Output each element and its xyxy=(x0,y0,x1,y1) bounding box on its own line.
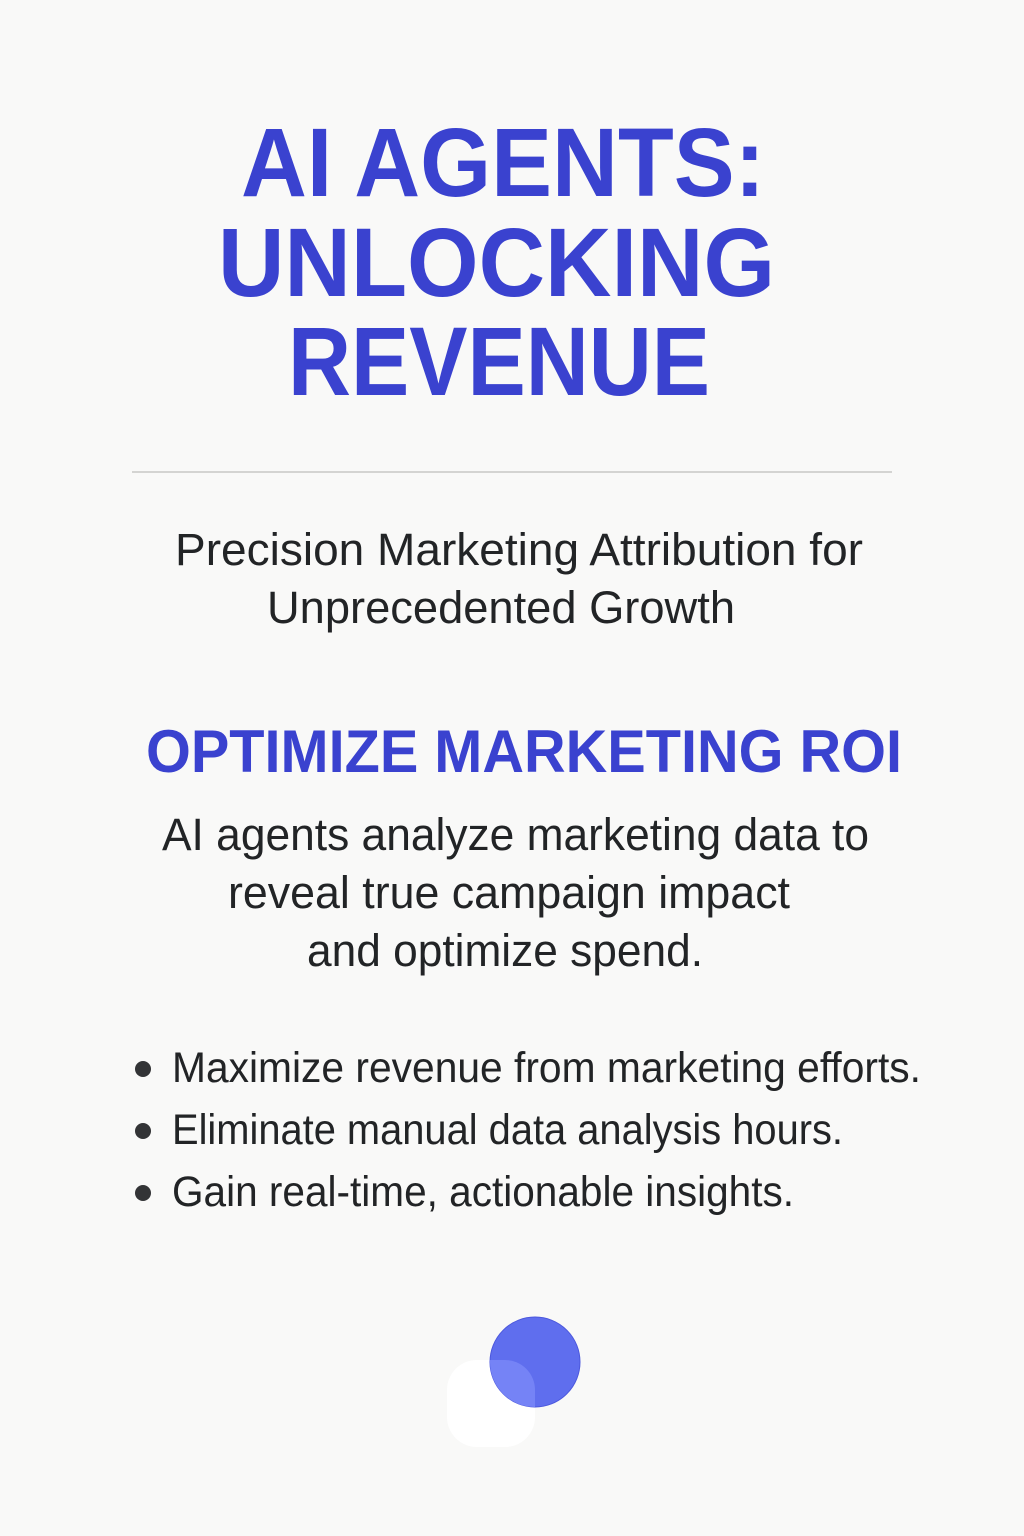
body paragraph: and optimize spend. xyxy=(307,925,703,976)
body paragraph xyxy=(162,809,869,976)
subtitle: Unprecedented Growth xyxy=(267,582,735,633)
subtitle xyxy=(175,524,863,633)
body paragraph: reveal true campaign impact xyxy=(228,867,790,918)
title: AI AGENTS: xyxy=(241,108,765,217)
bullet list xyxy=(135,1044,921,1216)
title: UNLOCKING xyxy=(218,208,775,317)
body paragraph: AI agents analyze marketing data to xyxy=(162,809,869,860)
title: REVENUE xyxy=(288,307,710,416)
title xyxy=(218,108,775,416)
subtitle: Precision Marketing Attribution for xyxy=(175,524,863,575)
bullet item: maximize revenue: Maximize revenue from marketing efforts. xyxy=(172,1044,921,1092)
icon: overlapping circle and rounded square xyxy=(490,1316,580,1408)
bullet item: real-time insights: Gain real-time, actionable insights. xyxy=(172,1168,794,1216)
section heading: OPTIMIZE MARKETING ROI xyxy=(146,718,902,785)
bullet item: eliminate manual analysis: Eliminate manual data analysis hours. xyxy=(172,1106,843,1154)
